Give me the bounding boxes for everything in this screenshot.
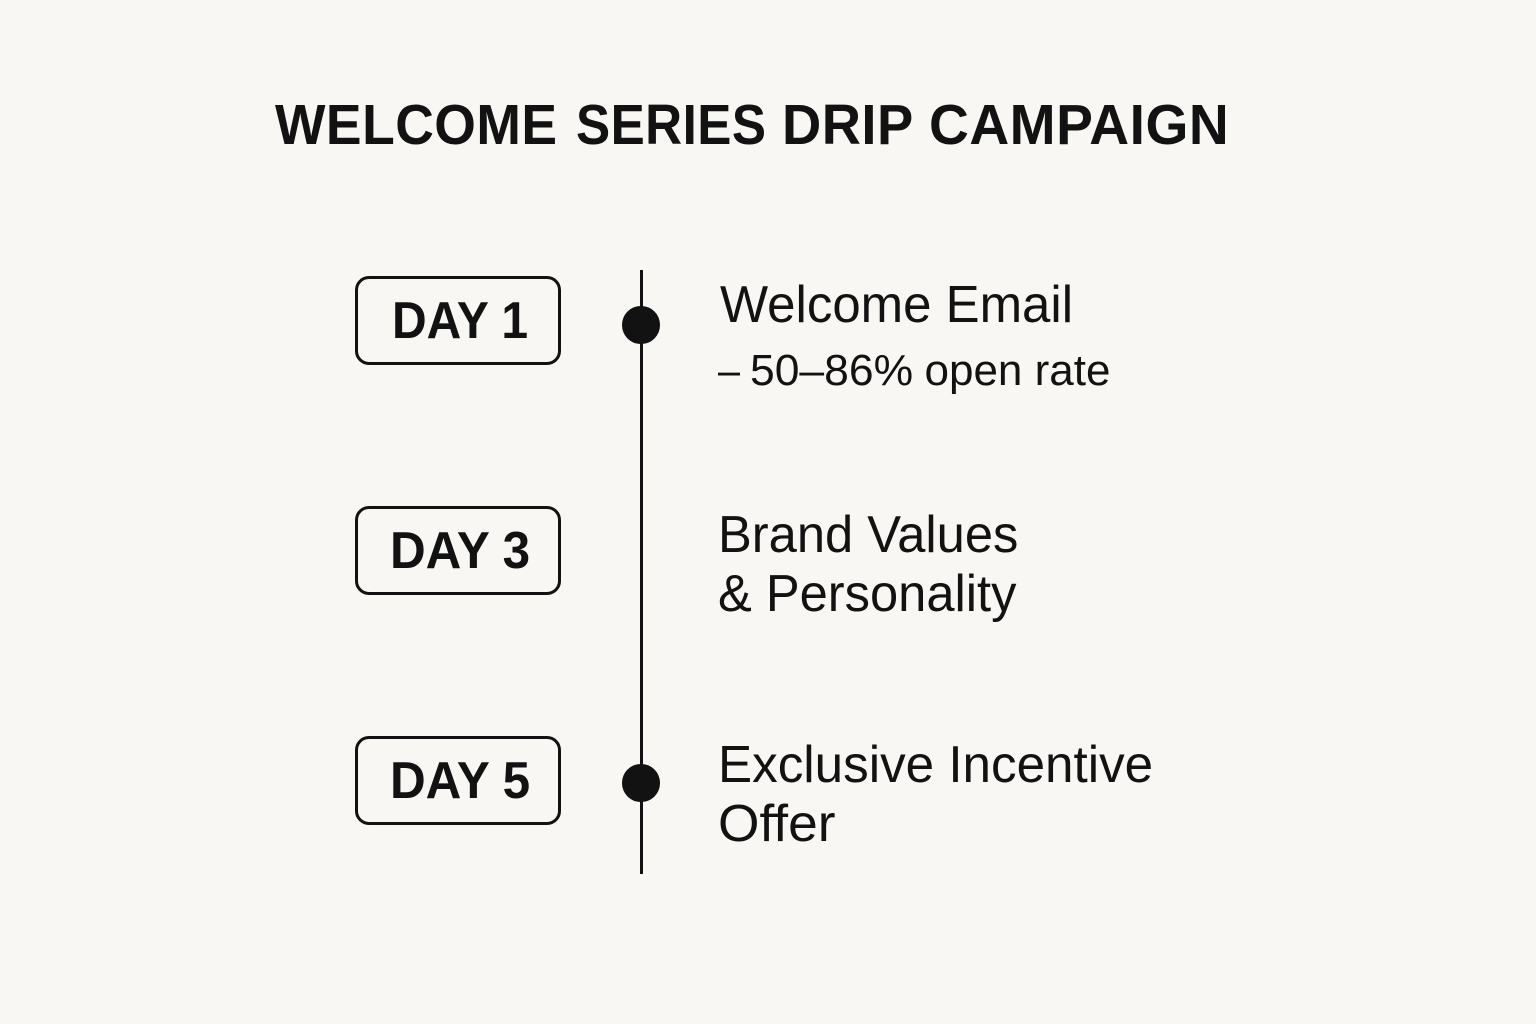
day 5 line 2: Offer: [718, 795, 836, 853]
day 3 badge: [355, 506, 561, 595]
day 3 label: DAY 3: [390, 522, 530, 580]
dot: day 5: [622, 764, 660, 802]
day 1 text: [718, 276, 1110, 395]
day 1 badge: [355, 276, 561, 365]
day 1 stat: open rate: [924, 346, 1110, 395]
timeline line: [640, 270, 643, 874]
day 3 line 1: Brand Values: [718, 506, 1018, 564]
timeline: [622, 270, 660, 874]
day 5 badge: [355, 736, 561, 825]
title: CAMPAIGN: [929, 92, 1229, 156]
day 3 line 2: & Personality: [718, 565, 1016, 623]
title: [275, 92, 1229, 156]
day 1 label: DAY 1: [392, 292, 528, 350]
dot: day 1: [622, 306, 660, 344]
day 5 line 1: Exclusive Incentive: [718, 736, 1153, 794]
day 1 stat: [718, 346, 1110, 395]
title: DRIP: [782, 92, 914, 156]
day 1 heading: Welcome Email: [720, 276, 1073, 334]
day 3 text: [718, 506, 1018, 623]
day 5 text: [718, 736, 1153, 853]
day 1 stat: –: [718, 346, 740, 395]
title: WELCOME: [275, 92, 557, 156]
day 5 label: DAY 5: [390, 752, 530, 810]
day 1 stat: 50–86%: [750, 346, 913, 395]
title: SERIES: [576, 92, 766, 156]
